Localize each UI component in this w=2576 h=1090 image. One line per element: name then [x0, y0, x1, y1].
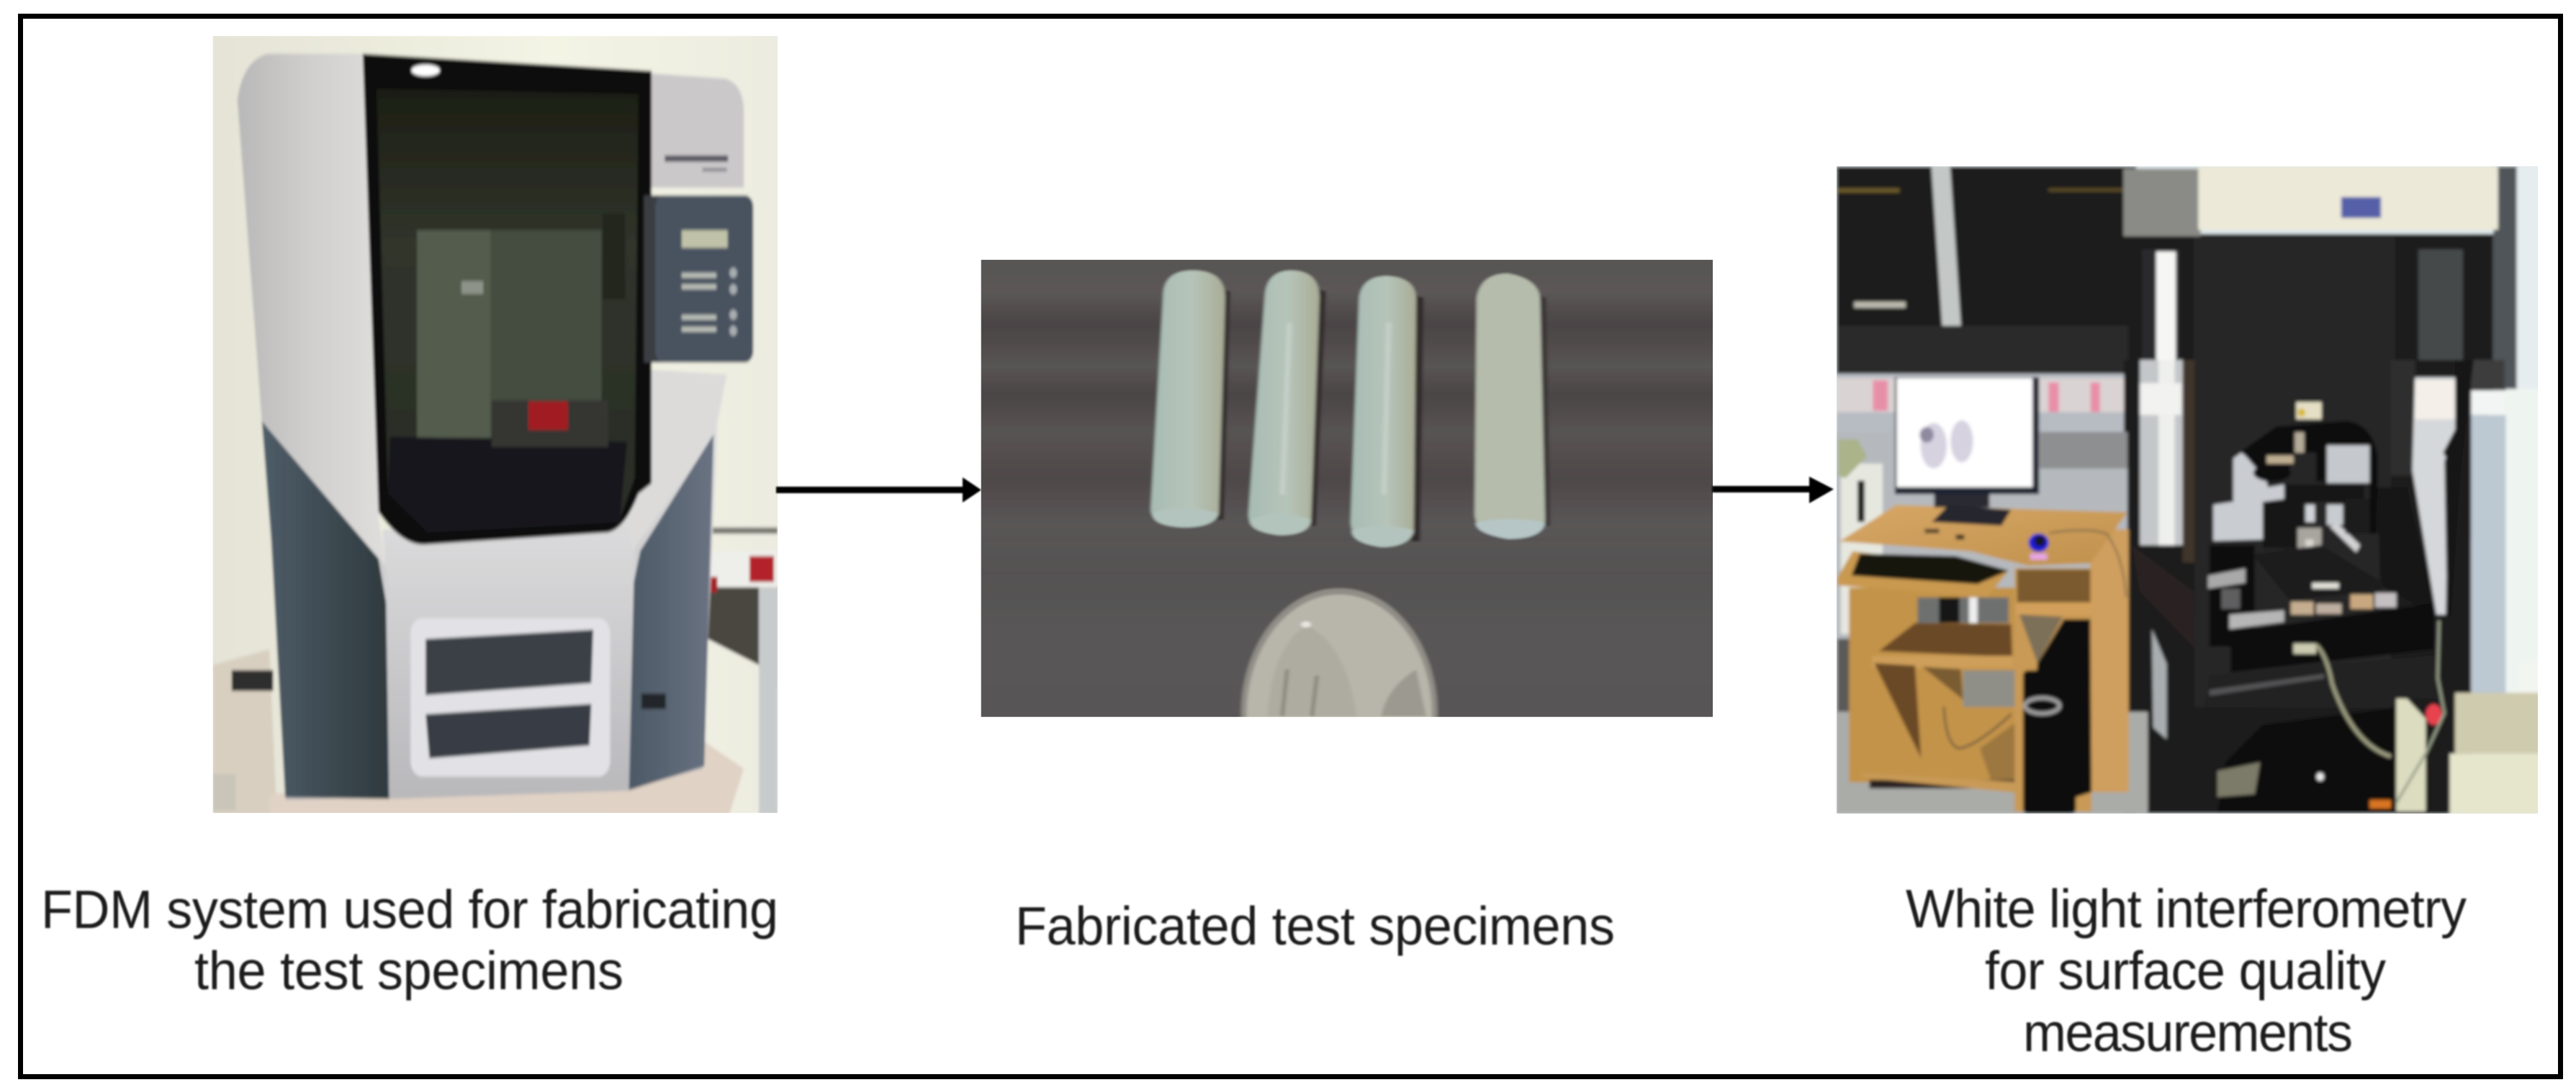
lower shelf — [2217, 707, 2396, 814]
arrow: specimens to interferometer — [1712, 477, 1834, 503]
upper shell — [238, 54, 386, 567]
caption: white light interferometry line 2: for surface quality — [1985, 940, 2386, 1001]
control panel — [644, 195, 665, 362]
caption: white light interferometry: White light interferometry — [1906, 878, 2467, 939]
right side wall — [2471, 415, 2506, 704]
photo: white light interferometry setup — [1829, 160, 2545, 819]
rod end faces — [1152, 508, 1217, 527]
caption: white light interferometry line 3: measurements — [2023, 1001, 2353, 1063]
captions — [41, 878, 2467, 1063]
monitor — [1895, 377, 2039, 494]
lower shell — [264, 416, 718, 800]
drawers — [410, 618, 610, 777]
rods — [1150, 271, 1225, 527]
computer desk — [1836, 432, 2148, 814]
caption: fabricated specimens: Fabricated test specimens — [1015, 895, 1615, 956]
photo: fabricated test specimens — [981, 259, 1713, 717]
upper scene — [1829, 160, 2545, 819]
instrument stage — [2124, 360, 2543, 814]
caption: FDM system: FDM system used for fabricating — [41, 878, 778, 940]
window — [363, 54, 652, 544]
stage opening — [2213, 453, 2284, 541]
caption: FDM system line 2: the test specimens — [194, 940, 623, 1001]
rod highlights — [1282, 323, 1289, 495]
coin — [1241, 588, 1438, 838]
photo: FDM system — [209, 32, 781, 818]
arrow: printer to specimens — [776, 477, 981, 503]
rod shadows — [1215, 289, 1230, 520]
instrument upper body — [2130, 232, 2474, 364]
